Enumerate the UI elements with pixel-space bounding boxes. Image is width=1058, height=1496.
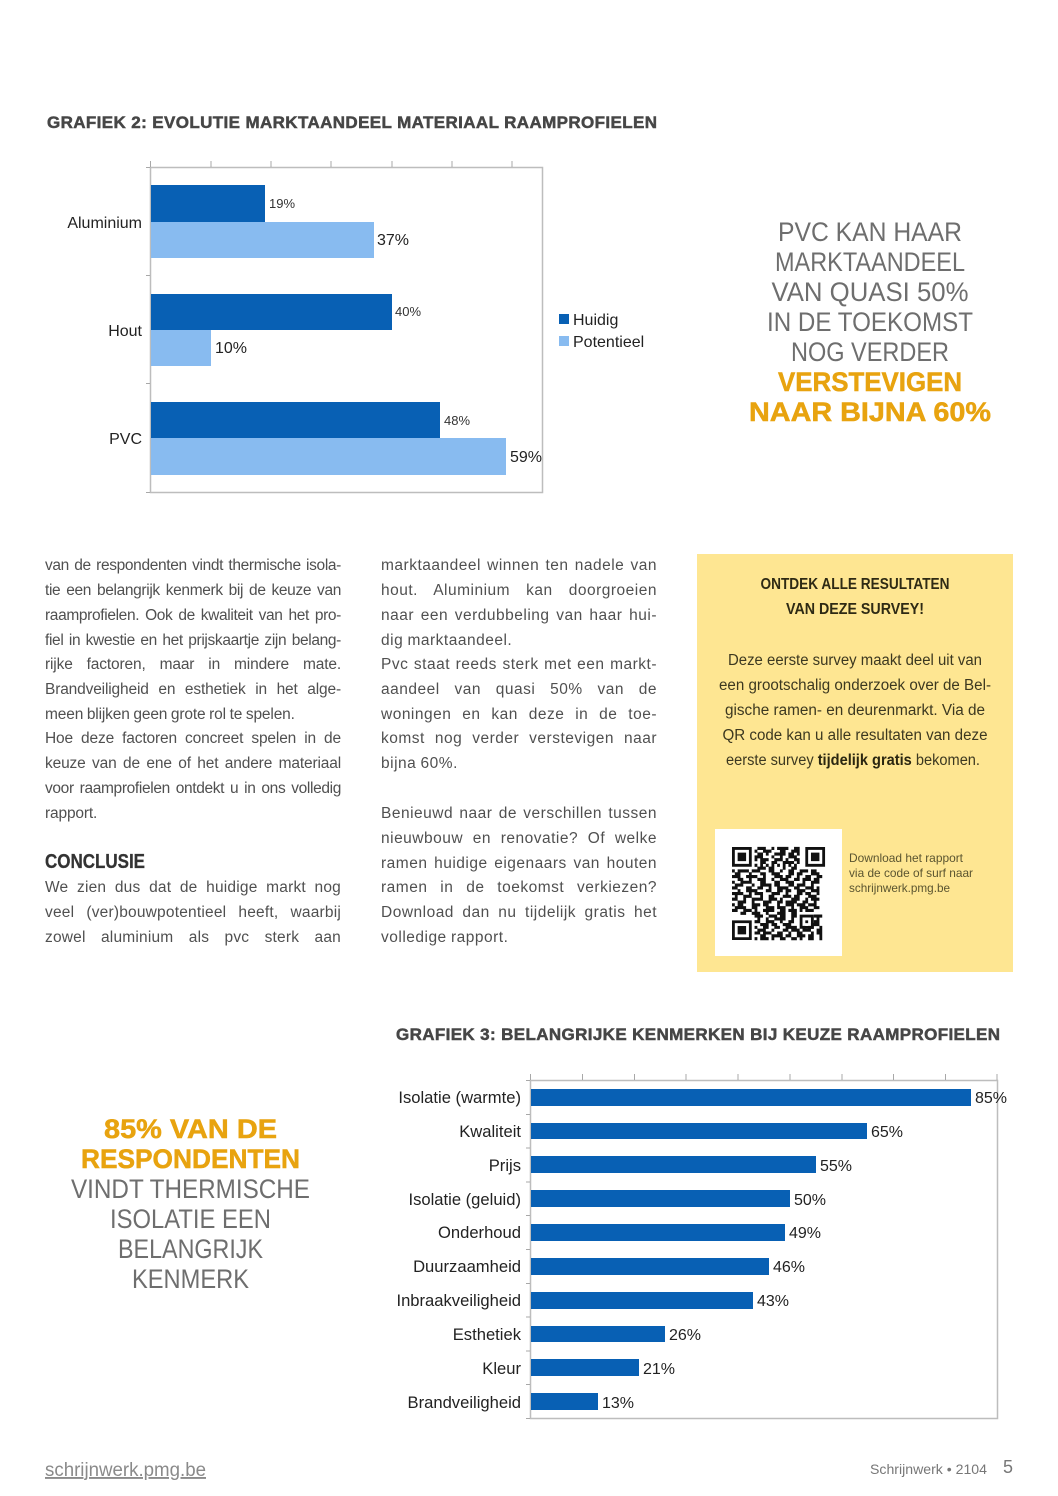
bars: pvc: 59% (510, 449, 542, 466)
text block: kolom 1: Brandveiligheid en esthetiek in het alge- (45, 681, 341, 698)
bar: inbraakveiligheid (396, 1291, 789, 1310)
bar: kwaliteit (459, 1122, 903, 1141)
panel text: Deze eerste survey maakt deel uit van (728, 652, 982, 669)
legend: Potentieel (573, 334, 644, 351)
bar: isolatie warmte (398, 1088, 1007, 1107)
qr caption: schrijnwerk.pmg.be (849, 881, 950, 895)
legend (559, 312, 644, 351)
qr caption (849, 851, 973, 895)
text block: kolom 2: ramen huidige eigenaars van houten (381, 855, 657, 872)
bar: duurzaamheid (413, 1257, 805, 1276)
bar: esthetiek: 26% (669, 1327, 701, 1344)
text block: kolom 2: hout. Aluminium kan doorgroeien (381, 582, 657, 599)
bars: hout: Hout (108, 323, 143, 340)
callout: thermische isolatie: 85% VAN DE (104, 1114, 277, 1144)
bar: kwaliteit: 65% (871, 1124, 903, 1141)
callout: thermische isolatie: RESPONDENTEN (81, 1144, 300, 1174)
panel text: gische ramen- en deurenmarkt. Via de (725, 702, 985, 719)
panel: ontdek alle resultaten (697, 554, 1013, 972)
bar chart: belangrijke kenmerken (396, 1074, 1007, 1418)
text block: kolom 2: ramen in de toekomst verkiezen? (381, 879, 657, 896)
text block: kolom 2: dig marktaandeel. (381, 632, 512, 649)
text block: kolom 2 (381, 557, 657, 946)
footer: magazine issue: Schrijnwerk • 2104 (870, 1461, 987, 1477)
bar: isolatie geluid (408, 1190, 826, 1209)
callout: thermische isolatie: ISOLATIE EEN (110, 1204, 271, 1234)
bar: kleur: 21% (643, 1361, 675, 1378)
bar: duurzaamheid: 46% (773, 1259, 805, 1276)
qr code (715, 829, 842, 956)
bars: pvc (109, 402, 542, 475)
callout: pvc marktaandeel: VAN QUASI 50% (772, 277, 968, 307)
bar: prijs (489, 1156, 852, 1175)
text block: kolom 2: volledige rapport. (381, 929, 508, 946)
panel heading: ONTDEK ALLE RESULTATEN (760, 576, 950, 593)
callout: pvc marktaandeel: IN DE TOEKOMST (767, 307, 973, 337)
text block: kolom 2: woningen en kan deze in de toe- (381, 706, 657, 723)
text block: kolom 2: marktaandeel winnen ten nadele van (381, 557, 657, 574)
panel text: een grootschalig onderzoek over de Bel- (719, 677, 991, 694)
bar: brandveiligheid: Brandveiligheid (408, 1393, 521, 1412)
text block: kolom 1: Hoe deze factoren concreet spelen in de (45, 730, 341, 747)
bars: aluminium: 19% (269, 196, 295, 211)
bar: kwaliteit: Kwaliteit (459, 1122, 521, 1141)
bar: isolatie warmte: Isolatie (warmte) (398, 1088, 521, 1107)
footer: website: schrijnwerk.pmg.be (45, 1460, 206, 1481)
heading: grafiek 3: GRAFIEK 3: BELANGRIJKE KENMERKEN BIJ KEUZE RAAMPROFIELEN (396, 1025, 1000, 1044)
bar: isolatie geluid: Isolatie (geluid) (408, 1190, 521, 1209)
bars: aluminium (67, 185, 409, 258)
panel text: QR code kan u alle resultaten van deze (722, 727, 988, 744)
callout: pvc marktaandeel: PVC KAN HAAR (778, 217, 962, 247)
bars: hout: 40% (395, 304, 421, 319)
legend: Huidig (573, 312, 618, 329)
bar: brandveiligheid: 13% (602, 1395, 634, 1412)
text block: kolom 2: komst nog verder verstevigen naar (381, 730, 657, 747)
bar: onderhoud: 49% (789, 1225, 821, 1242)
bar: onderhoud (438, 1223, 821, 1242)
text block: kolom 1: voor raamprofielen ontdekt u in ons volledig (45, 780, 341, 797)
text block: kolom 1: fiel in kwestie en het prijskaartje zijn belang- (45, 632, 341, 649)
bar chart: evolutie marktaandeel (67, 161, 542, 492)
text block: kolom 2: aandeel van quasi 50% van de (381, 681, 657, 698)
bar: prijs: 55% (820, 1158, 852, 1175)
text block: kolom 1: meen blijken geen grote rol te spelen. (45, 706, 295, 723)
text block: kolom 2: Pvc staat reeds sterk met een markt- (381, 656, 657, 673)
panel text (719, 652, 991, 769)
callout: pvc marktaandeel: NOG VERDER (791, 337, 949, 367)
bar: esthetiek (453, 1325, 701, 1344)
bars: pvc: 48% (444, 413, 470, 428)
bars: aluminium: 37% (377, 232, 409, 249)
text block: kolom 2: nieuwbouw en renovatie? Of welke (381, 830, 657, 847)
text block: conclusie (45, 879, 341, 946)
bar: isolatie geluid: 50% (794, 1192, 826, 1209)
text block: conclusie: veel (ver)bouwpotentieel heeft, waarbij (45, 904, 341, 921)
bars: hout: 10% (215, 340, 247, 357)
bar: kleur (482, 1359, 675, 1378)
callout: pvc marktaandeel (749, 217, 991, 427)
panel text: eerste survey tijdelijk gratis bekomen. (726, 752, 980, 769)
text block: kolom 1 (45, 557, 341, 822)
bar: duurzaamheid: Duurzaamheid (413, 1257, 521, 1276)
text block: conclusie: zowel aluminium als pvc sterk aan (45, 929, 341, 946)
bar: prijs: Prijs (489, 1156, 521, 1175)
callout: thermische isolatie: VINDT THERMISCHE (71, 1174, 310, 1204)
bar: onderhoud: Onderhoud (438, 1223, 521, 1242)
callout: pvc marktaandeel: NAAR BIJNA 60% (749, 397, 991, 427)
callout: thermische isolatie: BELANGRIJK (118, 1234, 263, 1264)
text block: conclusie: We zien dus dat de huidige markt nog (45, 879, 341, 896)
bar: inbraakveiligheid: Inbraakveiligheid (396, 1291, 521, 1310)
bar: esthetiek: Esthetiek (453, 1325, 522, 1344)
text block: kolom 2: Benieuwd naar de verschillen tussen (381, 805, 657, 822)
bar: isolatie warmte: 85% (975, 1090, 1007, 1107)
text block: kolom 1: van de respondenten vindt thermische isola- (45, 557, 341, 574)
callout: pvc marktaandeel: MARKTAANDEEL (775, 247, 965, 277)
callout: pvc marktaandeel: VERSTEVIGEN (778, 367, 962, 397)
text block: kolom 2: Download dan nu tijdelijk gratis het (381, 904, 657, 921)
bar: inbraakveiligheid: 43% (757, 1293, 789, 1310)
qr caption: Download het rapport (849, 851, 964, 865)
heading: conclusie: CONCLUSIE (45, 851, 145, 873)
text block: kolom 1: rapport. (45, 805, 97, 822)
text block: kolom 1: rijke factoren, maar in mindere mate. (45, 656, 341, 673)
text block: kolom 1: tie een belangrijk kenmerk bij de keuze van (45, 582, 341, 599)
text block: kolom 2: bijna 60%. (381, 755, 458, 772)
callout: thermische isolatie (71, 1114, 310, 1294)
bar: kleur: Kleur (482, 1359, 521, 1378)
panel heading: VAN DEZE SURVEY! (786, 601, 924, 618)
bars: hout (108, 294, 421, 366)
text block: kolom 2: naar een verdubbeling van haar hui- (381, 607, 657, 624)
text block: kolom 1: keuze van de ene of het andere materiaal (45, 755, 341, 772)
text block: kolom 1: raamprofielen. Ook de kwaliteit van het pro- (45, 607, 341, 624)
bars: aluminium: Aluminium (67, 215, 142, 232)
footer: page number: 5 (1003, 1457, 1013, 1477)
heading: grafiek 2: GRAFIEK 2: EVOLUTIE MARKTAANDEEL MATERIAAL RAAMPROFIELEN (47, 113, 657, 132)
qr caption: via de code of surf naar (849, 866, 973, 880)
bars: pvc: PVC (109, 431, 142, 448)
bar: brandveiligheid (408, 1393, 634, 1412)
callout: thermische isolatie: KENMERK (132, 1264, 249, 1294)
panel heading (760, 576, 950, 618)
